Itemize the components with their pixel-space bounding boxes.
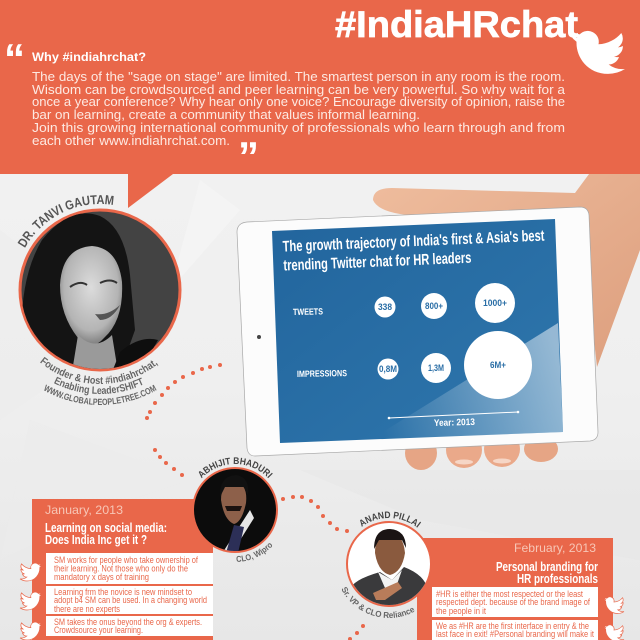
profile: Tanvi Gautam (20, 210, 180, 372)
intro text block: each other www.indiahrchat.com. (32, 133, 230, 148)
name: Tanvi Gautam: DR. TANVI GAUTAM (18, 195, 114, 248)
impressions row: 1,3M (428, 363, 444, 373)
finger 2 (446, 432, 482, 468)
hand holding tablet (373, 170, 640, 470)
chart screen (272, 219, 563, 443)
chart screen: trending Twitter chat for HR leaders (283, 250, 472, 275)
chart screen: The growth trajectory of India's first & Asia's best (282, 228, 545, 256)
role: Anand Pillai: Sr. VP & CLO Reliance (342, 587, 414, 618)
role: Tanvi Gautam: WWW.GLOBALPEOPLETREE.COM (44, 384, 156, 405)
icons: birds left (20, 563, 42, 640)
heart trail 1 (145, 363, 222, 477)
panel: February 2013: Personal branding for (496, 559, 598, 574)
tweet card 4 (432, 587, 598, 617)
panel: February 2013: February, 2013 (514, 541, 596, 555)
role: Abhijit Bhaduri: CLO, Wipro (236, 543, 272, 562)
tweet card 2: adopt b4 SM can be used. In a changing world (54, 595, 207, 605)
tweets row: 800+ (425, 301, 443, 311)
profile: Anand Pillai (347, 522, 431, 606)
impressions row (297, 331, 532, 399)
finger 1 (405, 436, 437, 470)
intro text block: The days of the "sage on stage" are limited. The smartest person in any room is the room. (32, 69, 565, 84)
impressions row: 6M+ (490, 360, 506, 370)
tweets row (293, 283, 515, 323)
tweet card 4: the people in it (436, 606, 486, 616)
panel: January 2013: Learning on social media: (45, 520, 167, 535)
name: Anand Pillai: ANAND PILLAI (360, 512, 422, 528)
tweet card 3: Crowdsource your learning. (54, 625, 143, 635)
tweets row: TWEETS (293, 306, 323, 317)
impressions row: IMPRESSIONS (297, 368, 347, 379)
tweet card 2: there are no experts (54, 604, 120, 614)
tweet card 4: respected dept. because of the brand image of (436, 597, 590, 607)
title: #IndiaHRchat (335, 4, 578, 45)
role: Tanvi Gautam: Enabling LeaderSHIFT (54, 376, 142, 396)
name: Abhijit Bhaduri: ABHIJIT BHADURI (198, 457, 273, 478)
intro text block: once a year conference? Why hear only one voice? Encourage diversity of opinion, raise the (32, 94, 565, 109)
role: Tanvi Gautam: Founder & Host #indiahrchat, (40, 356, 158, 384)
intro text block: Why #indiahrchat? (32, 50, 146, 64)
tablet (237, 207, 598, 456)
icons: birds right (604, 597, 624, 640)
icon: twitter bird header (571, 31, 625, 74)
intro text block: bar on learning, create a community that values informal learning. (32, 107, 420, 122)
year axis: Year: 2013 (434, 417, 475, 429)
panel: February 2013 (417, 538, 613, 640)
tweet card 1: SM works for people who take ownership of (54, 555, 198, 565)
tweets row: 1000+ (483, 298, 507, 308)
tweet card 3: SM takes the onus beyond the org & experts. (54, 617, 202, 627)
tweet card 4: #HR is either the most respected or the least (436, 589, 583, 599)
tweet card 2: Learning frm the novice is new mindset to (54, 587, 192, 597)
panel: January 2013 (32, 499, 213, 640)
intro text block: Join this growing international community of professionals who learn through and from (32, 120, 565, 135)
tweet card 3 (46, 616, 213, 636)
profile: Abhijit Bhaduri (193, 468, 277, 553)
panel: January 2013: January, 2013 (45, 503, 123, 517)
tweet card 1: their learning. Not those who only do the (54, 564, 188, 574)
finger 3 (484, 431, 520, 467)
tweets row: 338 (378, 302, 392, 312)
intro text block: Wisdom can be crowdsourced and peer learning can be very powerful. So why wait for a (32, 82, 566, 97)
tweet card 2 (46, 586, 213, 614)
panel: February 2013: HR professionals (517, 571, 598, 586)
intro text block (32, 50, 566, 148)
panel: January 2013: Does India Inc get it ? (45, 532, 147, 547)
tweet card 5: last face in exit! #Personal branding will make it (436, 629, 594, 639)
finger 4 (524, 436, 558, 462)
heart trail 2 (281, 495, 349, 533)
closing quote mark: ” (238, 133, 259, 180)
opening quote mark: “ (4, 35, 25, 82)
tweet card 1: mandatory x days of training (54, 572, 149, 582)
header banner with speech tail (0, 0, 640, 208)
tweet card 5: We as #HR are the first interface in entry & the (436, 621, 589, 631)
tweet card 5 (432, 620, 598, 640)
heart trail 3 (348, 624, 365, 640)
tweet card 1 (46, 553, 213, 584)
year axis (388, 411, 519, 429)
role: Tanvi Gautam (40, 356, 158, 405)
impressions row: 0,8M (379, 364, 397, 374)
